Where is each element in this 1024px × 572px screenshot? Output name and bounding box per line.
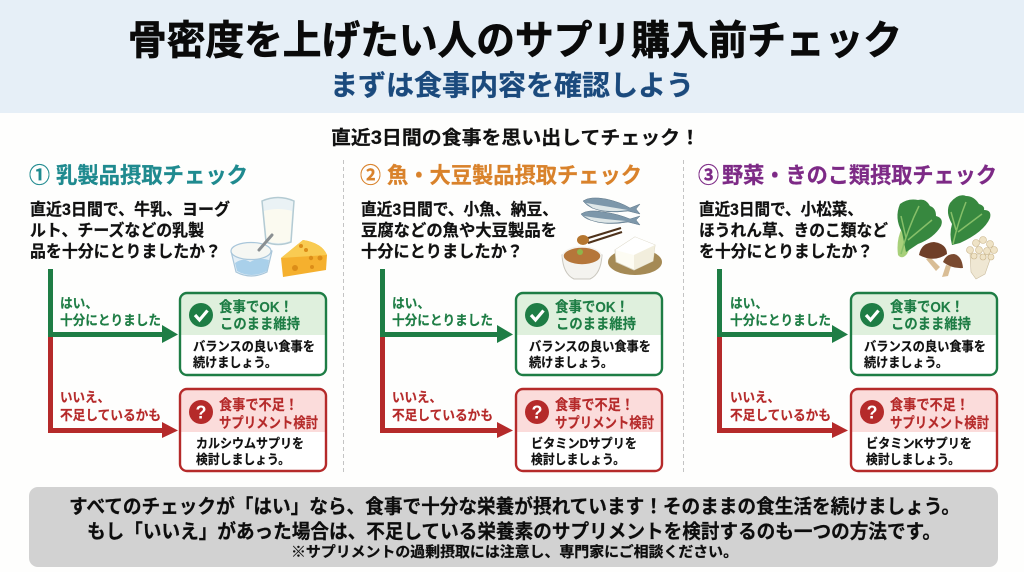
icon: milk, yogurt and cheese bbox=[231, 198, 327, 277]
result card: insufficient: カルシウムサプリを bbox=[196, 436, 304, 451]
label: no bbox=[730, 390, 831, 423]
flow arrow: no bbox=[380, 337, 513, 438]
panel: vegetables and mushrooms check bbox=[698, 163, 998, 471]
panel 2 heading: ② bbox=[360, 163, 381, 188]
result card: OK: バランスの良い食事を bbox=[193, 339, 315, 354]
summary text: もし「いいえ」があった場合は、不足している栄養素のサプリメントを検討するのも一つの方法です。 bbox=[87, 520, 941, 543]
panel 3 question: ほうれん草、きのこ類など bbox=[699, 221, 888, 240]
result card: insufficient: サプリメント検討 bbox=[555, 414, 654, 432]
panel 1 question: ルト、チーズなどの乳製 bbox=[30, 220, 204, 240]
panel 1 question: 直近3日間で、牛乳、ヨーグ bbox=[30, 199, 230, 219]
label: yes bbox=[392, 296, 493, 328]
result card: OK: 続けましょう。 bbox=[864, 355, 948, 370]
icon: greens and mushrooms bbox=[897, 195, 998, 279]
header band bbox=[0, 0, 1024, 113]
result card: insufficient: 検討しましょう。 bbox=[866, 452, 960, 467]
result card: OK: バランスの良い食事を bbox=[864, 339, 986, 354]
result card: insufficient: 食事で不足！ bbox=[555, 396, 634, 414]
result card: OK bbox=[516, 293, 662, 375]
result card: OK: このまま維持 bbox=[220, 315, 300, 333]
panel 2 heading: 魚・大豆製品摂取チェック bbox=[387, 163, 642, 188]
result card: insufficient: 食事で不足！ bbox=[890, 396, 969, 414]
result card: OK: 続けましょう。 bbox=[529, 355, 613, 370]
result card: insufficient: ビタミンDサプリを bbox=[531, 436, 637, 451]
label: no: 不足しているかも bbox=[730, 408, 831, 423]
panel: dairy check bbox=[29, 163, 327, 471]
result card: insufficient bbox=[851, 389, 997, 471]
title: 骨密度を上げたい人のサプリ購入前チェック bbox=[128, 19, 902, 63]
icon: fish, natto and tofu bbox=[562, 198, 662, 279]
result card: insufficient: ? bbox=[866, 402, 878, 422]
panel 3 heading: 野菜・きのこ類摂取チェック bbox=[722, 163, 997, 188]
result card: OK: 食事でOK！ bbox=[555, 298, 629, 316]
result card: insufficient bbox=[516, 389, 662, 471]
label: no: いいえ、 bbox=[392, 390, 442, 405]
label: yes: 十分にとりました bbox=[392, 312, 493, 328]
result card: OK: このまま維持 bbox=[556, 315, 636, 333]
result card: insufficient: 食事で不足！ bbox=[219, 396, 298, 414]
label: yes bbox=[730, 296, 831, 328]
panel 1 question: 品を十分にとりましたか？ bbox=[30, 242, 221, 261]
summary text: すべてのチェックが「はい」なら、食事で十分な栄養が摂れています！そのままの食生活を続けましょう。 bbox=[69, 495, 960, 518]
flow arrow: yes bbox=[717, 269, 848, 343]
panel 3 question: 直近3日間で、小松菜、 bbox=[699, 200, 863, 219]
label: yes bbox=[60, 296, 161, 328]
flow arrow: no bbox=[717, 337, 848, 438]
subtitle: まずは食事内容を確認しよう bbox=[330, 70, 694, 101]
result card: OK bbox=[851, 293, 997, 375]
label: yes: 十分にとりました bbox=[730, 312, 831, 328]
label: yes: 十分にとりました bbox=[60, 312, 161, 328]
flow arrow: yes bbox=[48, 269, 178, 343]
result card: OK bbox=[180, 293, 326, 375]
summary text: ※サプリメントの過剰摂取には注意し、専門家にご相談ください。 bbox=[291, 543, 738, 561]
panel 2 question bbox=[361, 199, 558, 261]
result card: insufficient: サプリメント検討 bbox=[219, 414, 318, 432]
result card: OK: バランスの良い食事を bbox=[529, 339, 651, 354]
label: yes: はい、 bbox=[60, 296, 98, 311]
panel 1 question bbox=[30, 199, 230, 261]
result card: insufficient: ? bbox=[532, 402, 542, 422]
label: no bbox=[392, 390, 493, 423]
flow arrow: no bbox=[48, 337, 178, 438]
panel: fish and soy check bbox=[360, 163, 662, 471]
panel 2 question: 直近3日間で、小魚、納豆、 bbox=[361, 199, 558, 219]
result card: insufficient bbox=[180, 389, 326, 471]
panel 1 heading: ① bbox=[29, 163, 50, 188]
result card: insufficient: ? bbox=[196, 402, 206, 422]
summary text bbox=[69, 495, 960, 561]
panel 3 question bbox=[699, 200, 888, 261]
label: no: 不足しているかも bbox=[392, 408, 493, 423]
instruction line: 直近3日間の食事を思い出してチェック！ bbox=[331, 127, 700, 149]
label: no: 不足しているかも bbox=[60, 408, 161, 423]
result card: OK: このまま維持 bbox=[891, 315, 971, 333]
label: no: いいえ、 bbox=[730, 390, 780, 405]
panel 1 heading: 乳製品摂取チェック bbox=[56, 163, 248, 188]
panel 2 question: 豆腐などの魚や大豆製品を bbox=[361, 220, 557, 240]
panel 3 question: を十分にとりましたか？ bbox=[699, 242, 873, 261]
label: yes: はい、 bbox=[730, 296, 768, 311]
result card: insufficient: ビタミンKサプリを bbox=[866, 436, 972, 451]
result card: OK: 続けましょう。 bbox=[193, 355, 277, 370]
flow arrow: yes bbox=[380, 269, 513, 343]
result card: insufficient: 検討しましょう。 bbox=[196, 452, 290, 467]
label: no bbox=[60, 390, 161, 423]
label: yes: はい、 bbox=[392, 296, 430, 311]
panel 2 question: 十分にとりましたか？ bbox=[361, 242, 523, 261]
result card: insufficient: サプリメント検討 bbox=[890, 414, 989, 432]
summary panel bbox=[29, 487, 998, 567]
label: no: いいえ、 bbox=[60, 390, 110, 405]
panel 3 heading: ③ bbox=[698, 163, 719, 188]
result card: insufficient: 検討しましょう。 bbox=[531, 452, 625, 467]
result card: OK: 食事でOK！ bbox=[219, 298, 293, 316]
result card: OK: 食事でOK！ bbox=[890, 298, 964, 316]
